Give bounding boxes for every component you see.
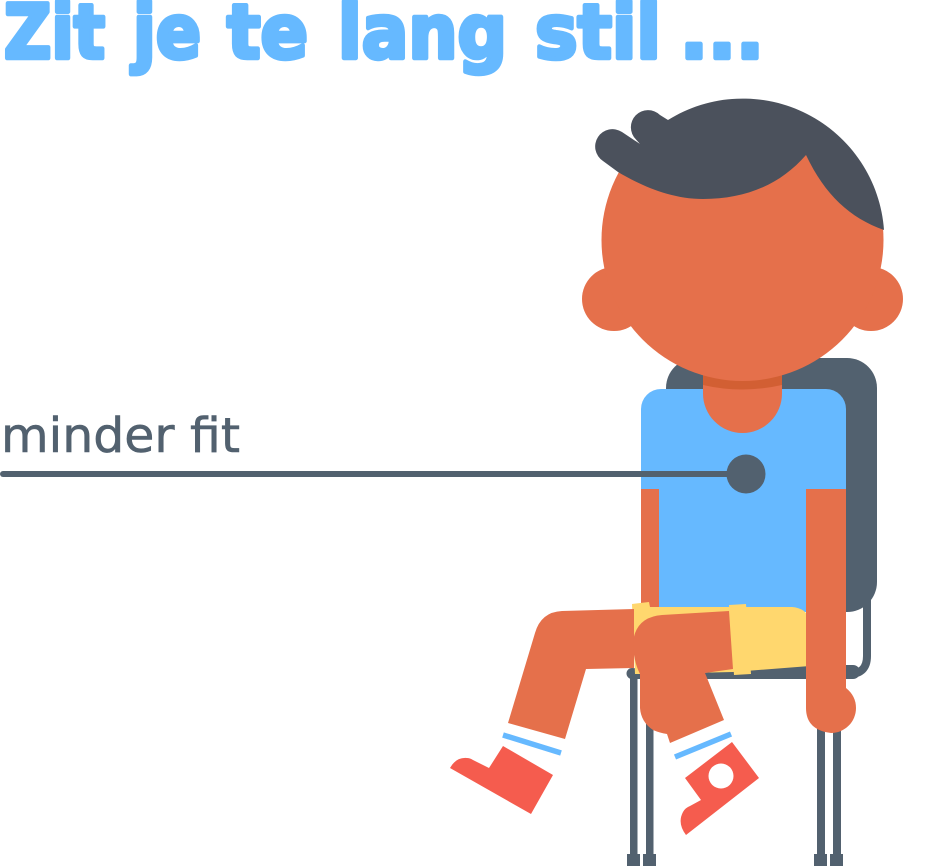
left arm (641, 489, 659, 611)
shorts (632, 602, 810, 674)
shirt (641, 389, 846, 612)
neck (703, 370, 782, 433)
front shoe (681, 742, 759, 835)
shoe circle (708, 764, 734, 788)
chair (626, 358, 877, 866)
boy (450, 99, 903, 835)
right arm (806, 489, 856, 733)
chair seat (626, 665, 860, 679)
callout line with dot (3, 454, 766, 494)
back sock stripe (503, 735, 561, 753)
ears (582, 267, 903, 331)
back shoe (450, 746, 553, 814)
chair back tube (849, 590, 867, 674)
neck shadow (703, 370, 782, 390)
chair legs (627, 672, 843, 866)
hair (595, 99, 884, 230)
front leg (633, 611, 733, 743)
chair backrest (666, 358, 877, 612)
shorts cuff (729, 604, 751, 675)
label: minder fit: minder fit (1, 408, 240, 464)
head (602, 99, 884, 381)
front sock stripe (675, 734, 731, 757)
back leg (508, 609, 634, 739)
title (4, 0, 764, 76)
